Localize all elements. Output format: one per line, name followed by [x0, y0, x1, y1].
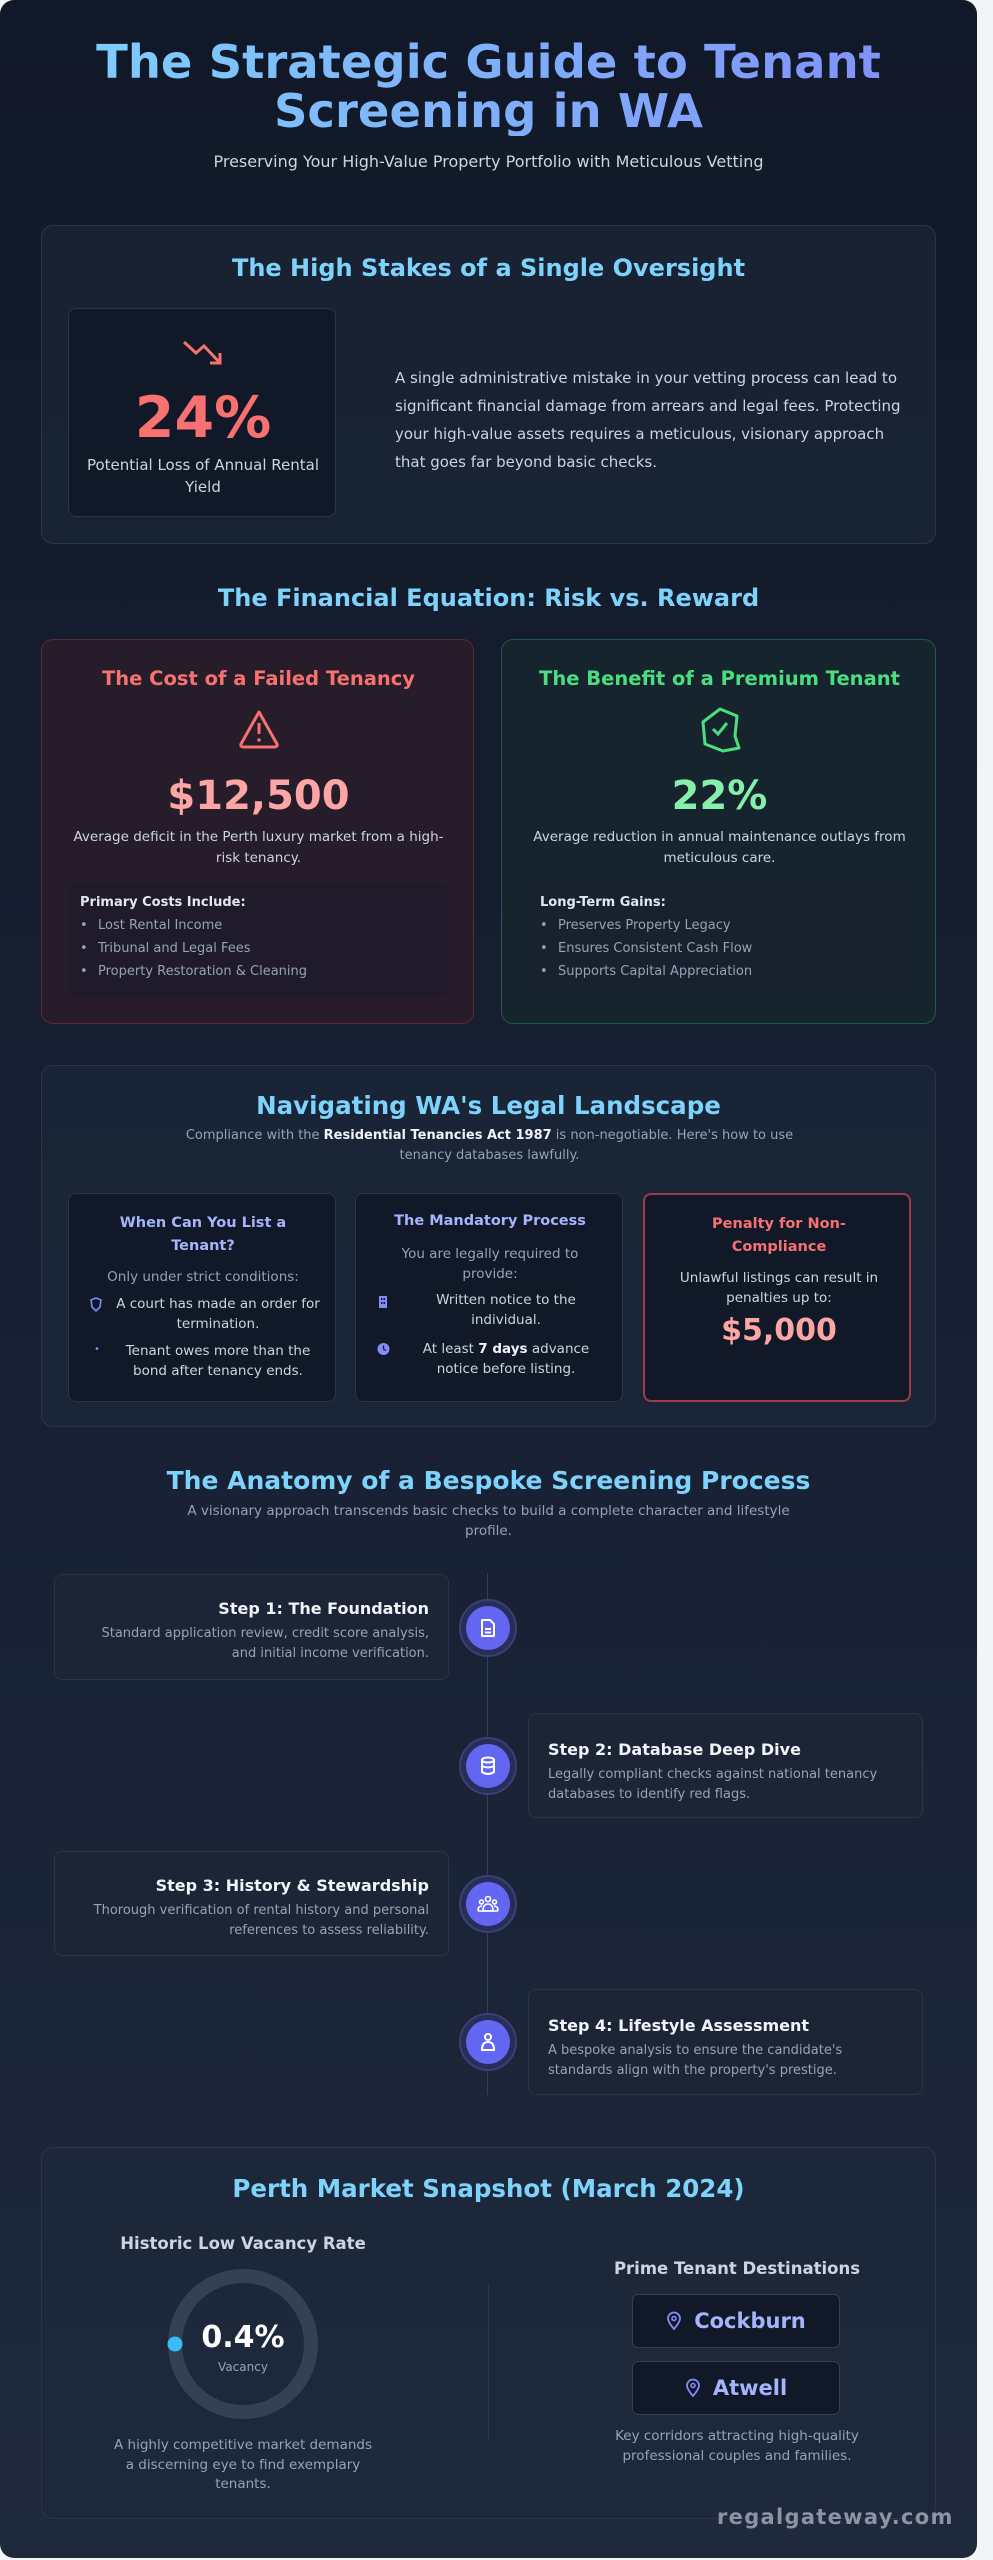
destinations block: Prime Tenant Destinations: [614, 2259, 860, 2278]
icon: shield check: [702, 708, 740, 752]
destinations block: [614, 2259, 860, 2464]
panel: market snapshot: [41, 2147, 936, 2519]
vacancy block: 0.4%: [201, 2320, 285, 2355]
text block: stakes description: A single administrative mistake in your vetting process can lead to significant financial damage from arrears and legal fees. Protecting your high-value assets requires a meticulous, visionary approach that goes far beyond basic checks.: [395, 369, 901, 471]
list: primary costs: Tribunal and Legal Fees: [98, 941, 251, 956]
card: mandatory process: At least 7 days advance notice before listing.: [423, 1341, 589, 1377]
card: when can you list: Only under strict conditions:: [107, 1269, 299, 1285]
panel: legal landscape: [41, 1065, 936, 1427]
list: long-term gains: [528, 883, 909, 997]
card: mandatory process: Written notice to the individual.: [436, 1292, 576, 1328]
step 4: [528, 1989, 923, 2095]
card: when can you list: •: [94, 1344, 100, 1355]
step 1: Step 1: The Foundation: [218, 1599, 429, 1618]
list: primary costs: Property Restoration & Cleaning: [98, 964, 307, 979]
step 3: Thorough verification of rental history and personal references to assess reliability.: [94, 1903, 429, 1938]
timeline: [54, 1573, 923, 2095]
step 4: Step 4: Lifestyle Assessment: [548, 2016, 809, 2035]
step 2: [528, 1713, 923, 1818]
subtitle: screening: A visionary approach transcends basic checks to build a complete character and lifestyle profile.: [187, 1503, 790, 1539]
description: Average deficit in the Perth luxury market from a high-risk tenancy.: [73, 829, 444, 866]
list: primary costs: •: [80, 964, 88, 979]
destinations block: Key corridors attracting high-quality professional couples and families.: [615, 2428, 859, 2464]
icon: people: [459, 1875, 517, 1933]
watermark: regalgateway.com: [717, 2505, 954, 2529]
stat box: 24%: [68, 308, 336, 517]
big number: $12,500: [167, 773, 350, 819]
title: The Strategic Guide to Tenant: [96, 35, 881, 89]
list: primary costs: •: [80, 941, 88, 956]
step 3: Step 3: History & Stewardship: [156, 1876, 429, 1895]
icon: clock: [378, 1343, 390, 1355]
card: penalty: Penalty for Non-Compliance: [712, 1216, 846, 1255]
card: mandatory process: [355, 1193, 623, 1402]
vacancy block: [114, 2234, 372, 2492]
list: primary costs: •: [80, 918, 88, 933]
list: primary costs: Primary Costs Include:: [80, 895, 246, 910]
step 2: Step 2: Database Deep Dive: [548, 1740, 801, 1759]
title: [0, 38, 977, 136]
heading: financial equation: The Financial Equation: Risk vs. Reward: [218, 584, 759, 612]
icon: person: [459, 2013, 517, 2071]
card: penalty: [643, 1193, 911, 1402]
icon: warning: [239, 710, 279, 748]
step 4: A bespoke analysis to ensure the candidate's standards align with the property's prestige.: [548, 2043, 842, 2078]
list: long-term gains: Supports Capital Appreciation: [558, 964, 752, 979]
list: long-term gains: •: [540, 918, 548, 933]
heading: high stakes: The High Stakes of a Single Oversight: [232, 254, 745, 282]
description: Average reduction in annual maintenance outlays from meticulous care.: [533, 829, 906, 866]
subtitle: legal: Compliance with the Residential Tenancies Act 1987 is non-negotiable. Here's how to use tenancy databases lawfully.: [186, 1128, 793, 1163]
list: long-term gains: Preserves Property Legacy: [558, 918, 731, 933]
stat label: Potential Loss of Annual Rental Yield: [87, 456, 319, 496]
icon: building: [379, 1296, 387, 1308]
panel: benefit of premium tenant: [501, 639, 936, 1024]
card: mandatory process: You are legally required to provide:: [402, 1246, 578, 1282]
icon: database: [459, 1737, 517, 1795]
list: long-term gains: •: [540, 941, 548, 956]
list: primary costs: [68, 883, 449, 997]
list: long-term gains: Ensures Consistent Cash Flow: [558, 941, 752, 956]
list: primary costs: Lost Rental Income: [98, 918, 222, 933]
list: long-term gains: •: [540, 964, 548, 979]
icon: document: [459, 1599, 517, 1657]
subtitle: Preserving Your High-Value Property Portfolio with Meticulous Vetting: [213, 152, 764, 171]
vacancy block: Historic Low Vacancy Rate: [120, 2234, 366, 2253]
card title: The Benefit of a Premium Tenant: [539, 667, 900, 690]
heading: market: Perth Market Snapshot (March 2024): [232, 2174, 745, 2203]
step 1: [54, 1574, 449, 1680]
stat number: 24%: [135, 385, 271, 451]
card: mandatory process: The Mandatory Process: [394, 1213, 586, 1229]
card: when can you list: [68, 1193, 336, 1402]
title: Screening in WA: [274, 84, 703, 138]
card: when can you list: When Can You List a Tenant?: [120, 1215, 286, 1254]
button: Atwell: [632, 2361, 840, 2415]
step 3: [54, 1851, 449, 1956]
vacancy block: A highly competitive market demands a discerning eye to find exemplary tenants.: [114, 2437, 372, 2492]
button: Atwell: Atwell: [713, 2376, 787, 2400]
card: when can you list: Tenant owes more than the bond after tenancy ends.: [126, 1343, 310, 1379]
button: Cockburn: [632, 2294, 840, 2348]
heading: screening process: The Anatomy of a Bespoke Screening Process: [167, 1466, 810, 1495]
card title: The Cost of a Failed Tenancy: [102, 667, 415, 690]
list: long-term gains: Long-Term Gains:: [540, 895, 666, 910]
icon: trending down: [183, 340, 222, 364]
button: Cockburn: Cockburn: [694, 2309, 806, 2333]
card: when can you list: A court has made an order for termination.: [116, 1296, 320, 1332]
card: penalty: Unlawful listings can result in penalties up to:: [680, 1270, 878, 1306]
step 1: Standard application review, credit score analysis, and initial income verification.: [101, 1626, 429, 1661]
vacancy block: Vacancy: [218, 2360, 268, 2374]
penalty amount: $5,000: [721, 1313, 837, 1348]
donut chart: [168, 2269, 318, 2419]
step 2: Legally compliant checks against national tenancy databases to identify red flags.: [548, 1767, 877, 1802]
big number: 22%: [672, 773, 767, 819]
icon: shield: [90, 1297, 102, 1312]
heading: legal: Navigating WA's Legal Landscape: [256, 1091, 721, 1120]
panel: cost of failed tenancy: [41, 639, 474, 1024]
panel: high stakes: [41, 225, 936, 544]
